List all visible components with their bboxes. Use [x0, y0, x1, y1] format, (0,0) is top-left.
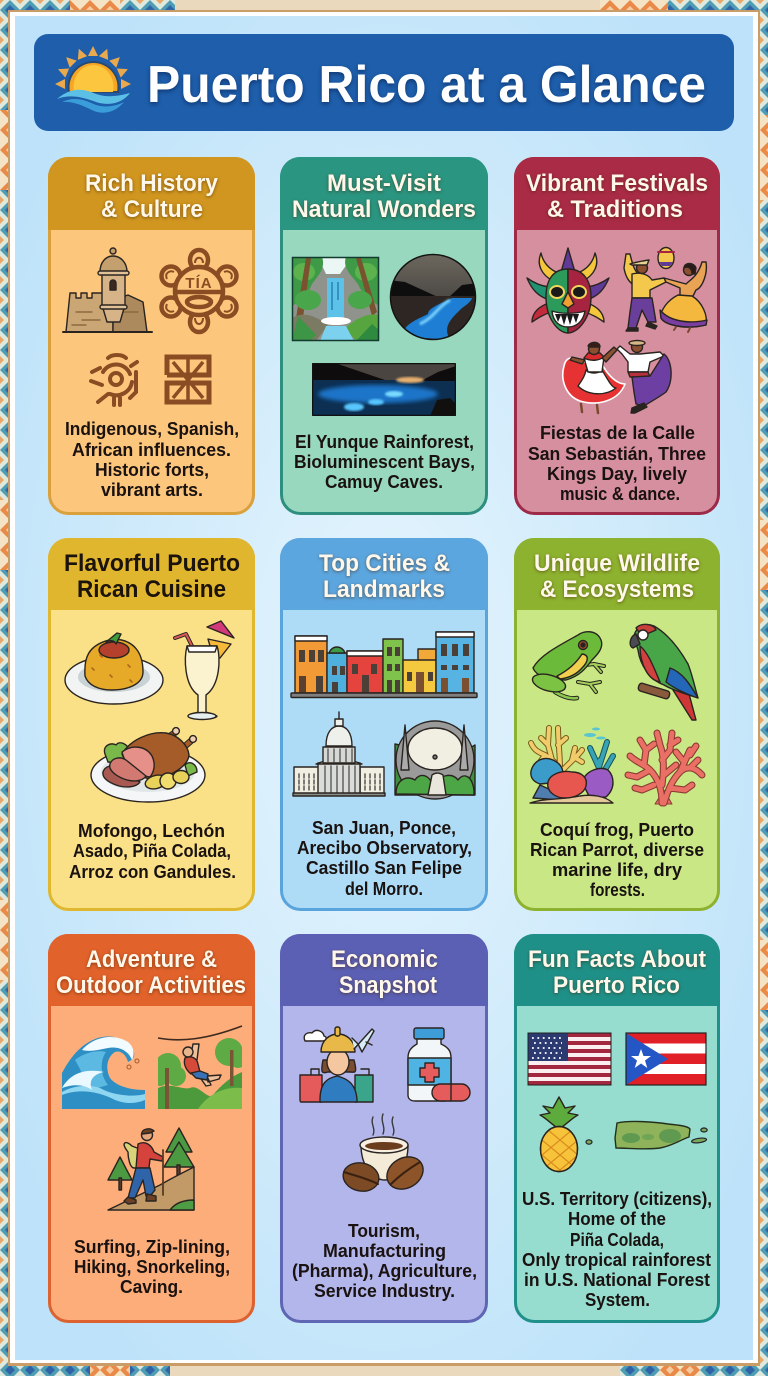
icon: red coral: [628, 733, 702, 804]
heading: Snapshot: [339, 972, 437, 999]
description text: Arecibo Observatory,: [297, 838, 472, 858]
heading: Landmarks: [323, 576, 445, 603]
icon: Taino sun: [162, 250, 236, 332]
icon: rainforest waterfall: [292, 257, 379, 341]
heading: & Culture: [101, 196, 203, 223]
panel: festivals and traditions: [514, 157, 720, 514]
description text: music & dance.: [560, 484, 680, 504]
heading: [85, 170, 219, 223]
icon: mofongo plate: [65, 633, 163, 704]
description text: Historic forts,: [95, 460, 209, 480]
panel: cities and landmarks: [280, 538, 488, 910]
description text: Surfing, Zip-lining,: [74, 1237, 230, 1257]
icon: reef group: [530, 728, 613, 803]
icon: pineapple: [539, 1096, 579, 1172]
description text: del Morro.: [345, 879, 423, 899]
panel: economic snapshot: [280, 934, 488, 1322]
icon: bioluminescent lagoon circle: [388, 254, 478, 340]
heading: Fun Facts About: [528, 946, 706, 973]
description text: Coquí frog, Puerto: [540, 820, 694, 840]
icon: petroglyph square: [167, 357, 209, 402]
heading: Rican Cuisine: [77, 576, 226, 603]
heading: [331, 946, 438, 999]
panel: wildlife: [514, 538, 720, 910]
heading: Economic: [331, 946, 438, 973]
icon: zip-lining: [152, 1026, 246, 1109]
icon: carnival dancers: [624, 248, 707, 332]
description text: Piña Colada,: [570, 1230, 664, 1250]
icon: Puerto Rico island map: [586, 1121, 707, 1149]
icon: Arecibo observatory: [395, 721, 475, 799]
heading: Flavorful Puerto: [64, 550, 240, 577]
heading: Must-Visit: [327, 170, 441, 197]
heading: Vibrant Festivals: [526, 170, 708, 197]
icon: pina colada: [175, 621, 234, 720]
description text: Rican Parrot, diverse: [530, 840, 704, 860]
description text: San Juan, Ponce,: [312, 818, 456, 838]
heading: Top Cities &: [319, 550, 450, 577]
icon: Puerto Rico flag: [626, 1033, 706, 1085]
description text: [294, 432, 475, 492]
description text: Bioluminescent Bays,: [294, 452, 475, 472]
heading: [64, 550, 240, 603]
icon: Taino sun: TÍA: [185, 275, 213, 292]
icon: Puerto Rican parrot: [630, 624, 698, 720]
icon: medicine bottle and pill: [408, 1028, 470, 1101]
icon: ocean wave: [62, 1037, 145, 1109]
heading: [319, 550, 450, 603]
description text: [522, 1189, 712, 1310]
heading: [528, 946, 706, 999]
icon: fort sentry box: [63, 248, 152, 332]
heading: & Ecosystems: [540, 576, 694, 603]
description text: in U.S. National Forest: [524, 1270, 710, 1290]
icon: United States flag: [528, 1033, 611, 1085]
description text: Hiking, Snorkeling,: [74, 1257, 230, 1277]
description text: El Yunque Rainforest,: [295, 432, 474, 452]
description text: Only tropical rainforest: [522, 1250, 711, 1270]
heading: [292, 170, 476, 223]
description text: Camuy Caves.: [325, 472, 443, 492]
heading: Puerto Rico: [553, 972, 680, 999]
heading: [534, 550, 700, 603]
heading: Rich History: [85, 170, 219, 197]
icon: petroglyph spiral: [91, 355, 137, 405]
icon: glowing bay at night: [312, 363, 456, 416]
title banner: [34, 34, 734, 131]
panel: fun facts: [514, 934, 720, 1322]
description text: Indigenous, Spanish,: [65, 419, 239, 439]
description text: Arroz con Gandules.: [69, 862, 236, 882]
description text: (Pharma), Agriculture,: [292, 1261, 477, 1281]
description text: Castillo San Felipe: [306, 858, 462, 878]
description text: African influences.: [72, 440, 231, 460]
description text: [69, 821, 236, 882]
description text: [528, 423, 706, 504]
description text: Kings Day, lively: [547, 464, 687, 484]
icon: capitol building: [293, 712, 385, 796]
description text: Manufacturing: [323, 1241, 446, 1261]
description text: [292, 1221, 477, 1301]
description text: U.S. Territory (citizens),: [522, 1189, 712, 1209]
description text: San Sebastián, Three: [528, 444, 706, 464]
icon: coffee cup and beans: [340, 1114, 429, 1195]
description text: Asado, Piña Colada,: [73, 841, 231, 861]
description text: [530, 820, 704, 900]
description text: Fiestas de la Calle: [540, 423, 695, 443]
panel: adventure: [48, 934, 255, 1322]
icon: vejigante mask: [527, 248, 609, 333]
description text: Service Industry.: [314, 1281, 455, 1301]
panel: natural wonders: [280, 157, 488, 514]
icon: colorful old San Juan street: [291, 632, 477, 698]
icon: coqui frog: [531, 632, 604, 698]
panel: history and culture: [48, 157, 255, 514]
description text: [297, 818, 472, 899]
description text: Tourism,: [348, 1221, 420, 1241]
description text: Home of the: [568, 1209, 666, 1229]
heading: Outdoor Activities: [56, 972, 246, 999]
waterfall frame: [292, 258, 378, 340]
description text: Mofongo, Lechón: [78, 821, 225, 841]
description text: [74, 1237, 230, 1297]
description text: forests.: [590, 880, 645, 900]
description text: [65, 419, 239, 500]
description text: Caving.: [120, 1277, 183, 1297]
heading: [56, 946, 246, 999]
icon: hiker: [108, 1128, 194, 1210]
title text: Puerto Rico at a Glance: [147, 56, 706, 114]
icon: tourism worker: [300, 1027, 374, 1102]
heading: [526, 170, 708, 223]
description text: vibrant arts.: [101, 480, 203, 500]
heading: Natural Wonders: [292, 196, 476, 223]
heading: Unique Wildlife: [534, 550, 700, 577]
heading: & Traditions: [547, 196, 683, 223]
icon: lechon plate: [91, 728, 205, 802]
icon: folk dance couple: [563, 340, 671, 413]
description text: marine life, dry: [552, 860, 682, 880]
heading: Adventure &: [86, 946, 217, 973]
panel: cuisine: [48, 538, 255, 910]
icon: sun over waves: [55, 46, 131, 113]
description text: System.: [585, 1290, 650, 1310]
